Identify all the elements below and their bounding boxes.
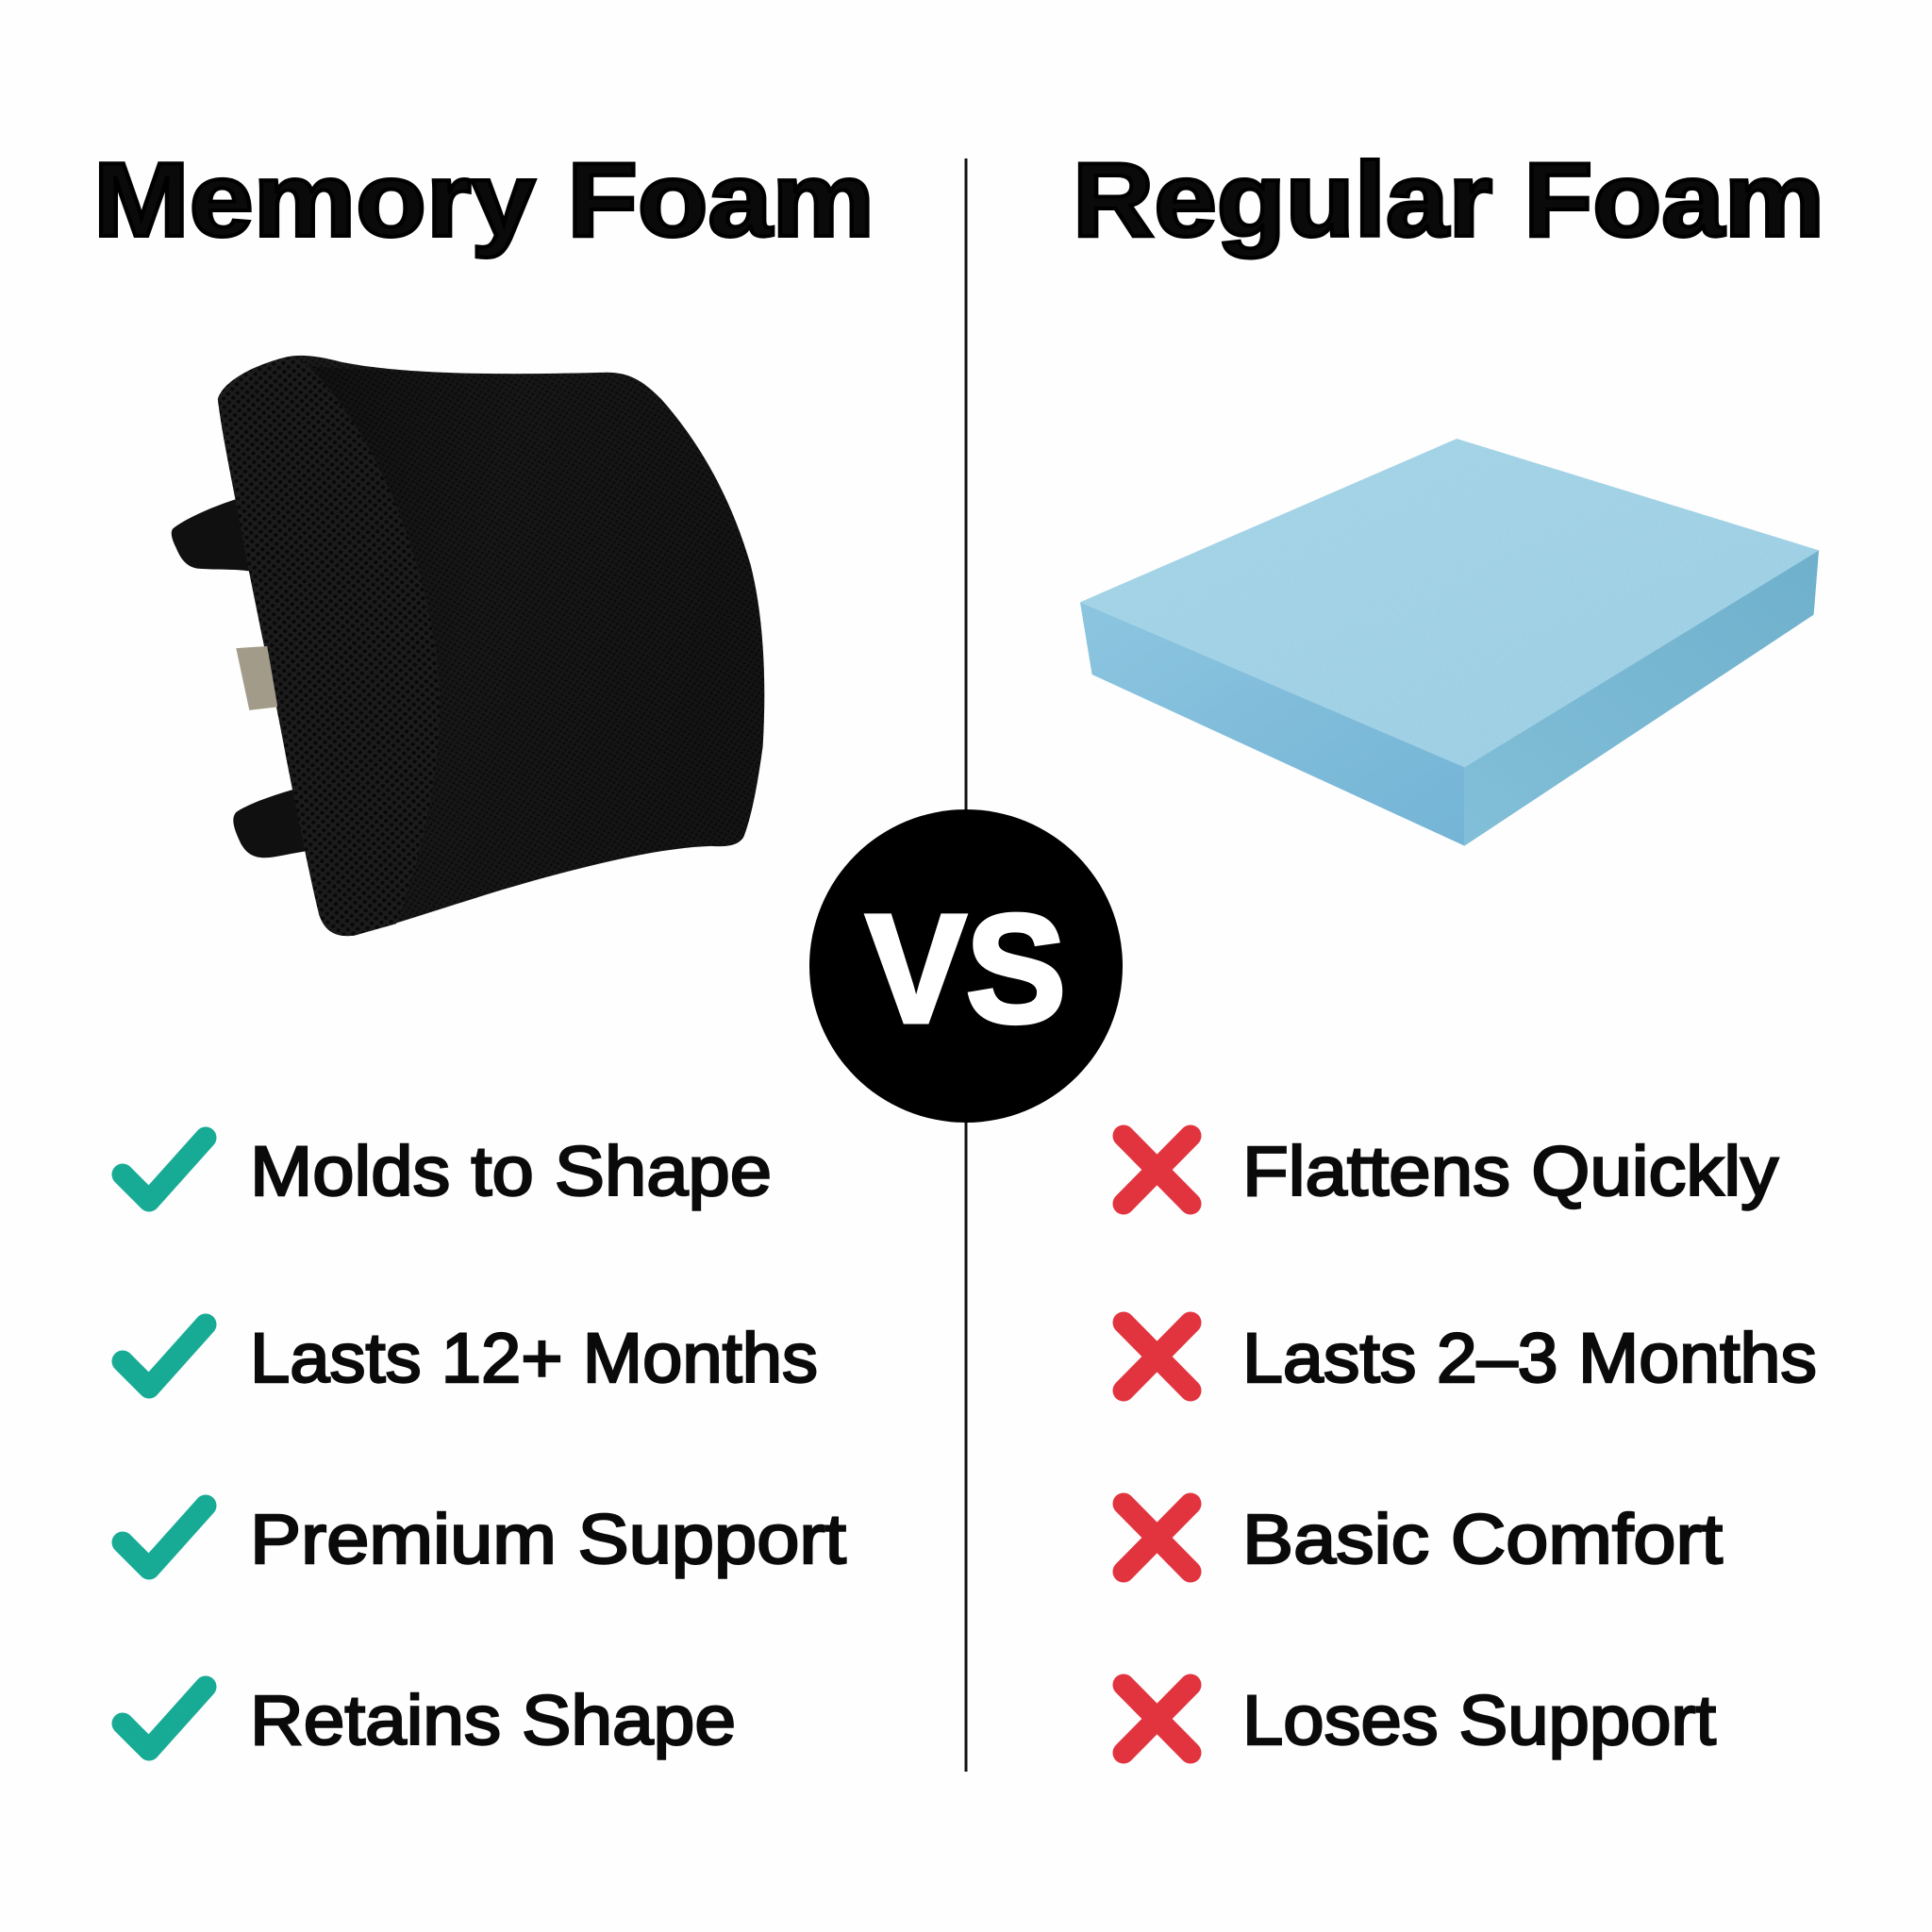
cushion front face shading (309, 366, 764, 924)
cushion body (218, 356, 764, 936)
VS badge (809, 809, 1123, 1123)
panel: regular foam drawbacks (1124, 1132, 1817, 1759)
item: flattens quickly: Flattens Quickly (1242, 1132, 1778, 1210)
foam right face (1464, 550, 1819, 846)
item: premium support: Premium Support (250, 1500, 846, 1578)
cushion side mesh panel (218, 357, 440, 936)
item: molds to shape: Molds to Shape (250, 1132, 772, 1210)
VS badge: VS (866, 882, 1066, 1055)
image: black memory foam lumbar cushion (172, 356, 764, 936)
foam surface speckle (1080, 439, 1819, 767)
item: lasts 2-3 months: Lasts 2–3 Months (1242, 1319, 1817, 1397)
item: loses support: Loses Support (1242, 1681, 1716, 1759)
panel: memory foam benefits (123, 1132, 846, 1759)
item: retains shape: Retains Shape (250, 1681, 736, 1759)
vertical divider (964, 158, 968, 1772)
heading: regular foam: Regular Foam (1073, 142, 1824, 258)
upper strap (172, 499, 255, 572)
fabric tag (236, 646, 277, 710)
foam left face (1080, 602, 1464, 846)
lower strap (233, 789, 319, 858)
foam top surface (1080, 439, 1819, 767)
image: blue regular foam block (1080, 439, 1819, 846)
item: basic comfort: Basic Comfort (1242, 1500, 1723, 1578)
item: lasts 12+ months: Lasts 12+ Months (250, 1319, 818, 1397)
heading: memory foam: Memory Foam (93, 142, 874, 258)
